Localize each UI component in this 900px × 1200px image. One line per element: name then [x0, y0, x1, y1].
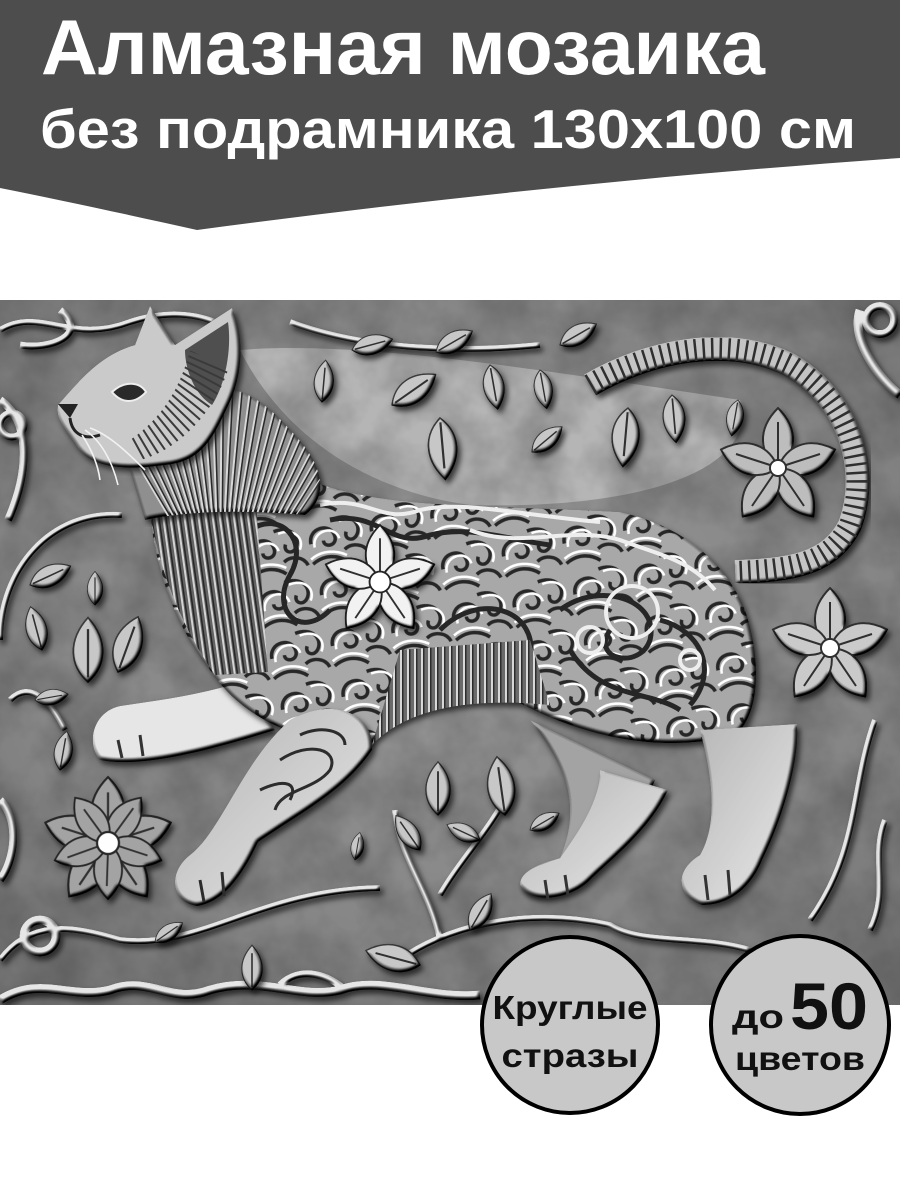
badge text: до: до — [732, 998, 784, 1035]
cat: mouth — [70, 418, 100, 437]
cat: far legs — [93, 682, 655, 894]
subtitle: без подрамника 130х100 см — [40, 98, 856, 160]
cat: eye — [112, 384, 146, 401]
cat: tail — [590, 349, 858, 572]
badge: round rhinestones — [482, 937, 658, 1113]
leaves — [21, 316, 746, 990]
light patch behind the cat's back — [240, 348, 742, 505]
cat: nose — [58, 404, 78, 418]
flower right — [768, 588, 892, 705]
flower right top — [716, 408, 840, 525]
badge text: стразы: стразы — [502, 1037, 638, 1074]
cat: head — [57, 306, 241, 468]
cat: neck mane — [130, 388, 320, 520]
cat: body — [150, 463, 756, 745]
ornamental vines and border — [0, 306, 900, 1000]
cat: hind legs — [520, 724, 797, 905]
cat: face fur — [130, 360, 215, 450]
badge: up to 50 colours — [711, 936, 889, 1114]
cat: ornament on body — [250, 518, 704, 710]
header band — [0, 0, 900, 230]
cat: body flower — [321, 525, 439, 637]
cat: belly fur — [372, 640, 550, 745]
cat figure — [57, 306, 857, 906]
cat: ear inner — [185, 322, 229, 405]
cat: front leg — [175, 709, 372, 906]
mottled texture — [0, 300, 900, 1005]
flowers — [30, 408, 892, 920]
badge text: Круглые: Круглые — [492, 989, 648, 1026]
picture background — [0, 300, 900, 1005]
badge text: цветов: цветов — [735, 1040, 865, 1077]
title: Алмазная мозаика — [41, 3, 766, 91]
cat: whiskers — [82, 428, 145, 485]
badge text: 50: 50 — [790, 969, 868, 1043]
flower bottom-left — [44, 776, 178, 906]
picture: embossed silver cat artwork — [0, 300, 900, 1005]
cat: chest fur — [152, 512, 268, 675]
